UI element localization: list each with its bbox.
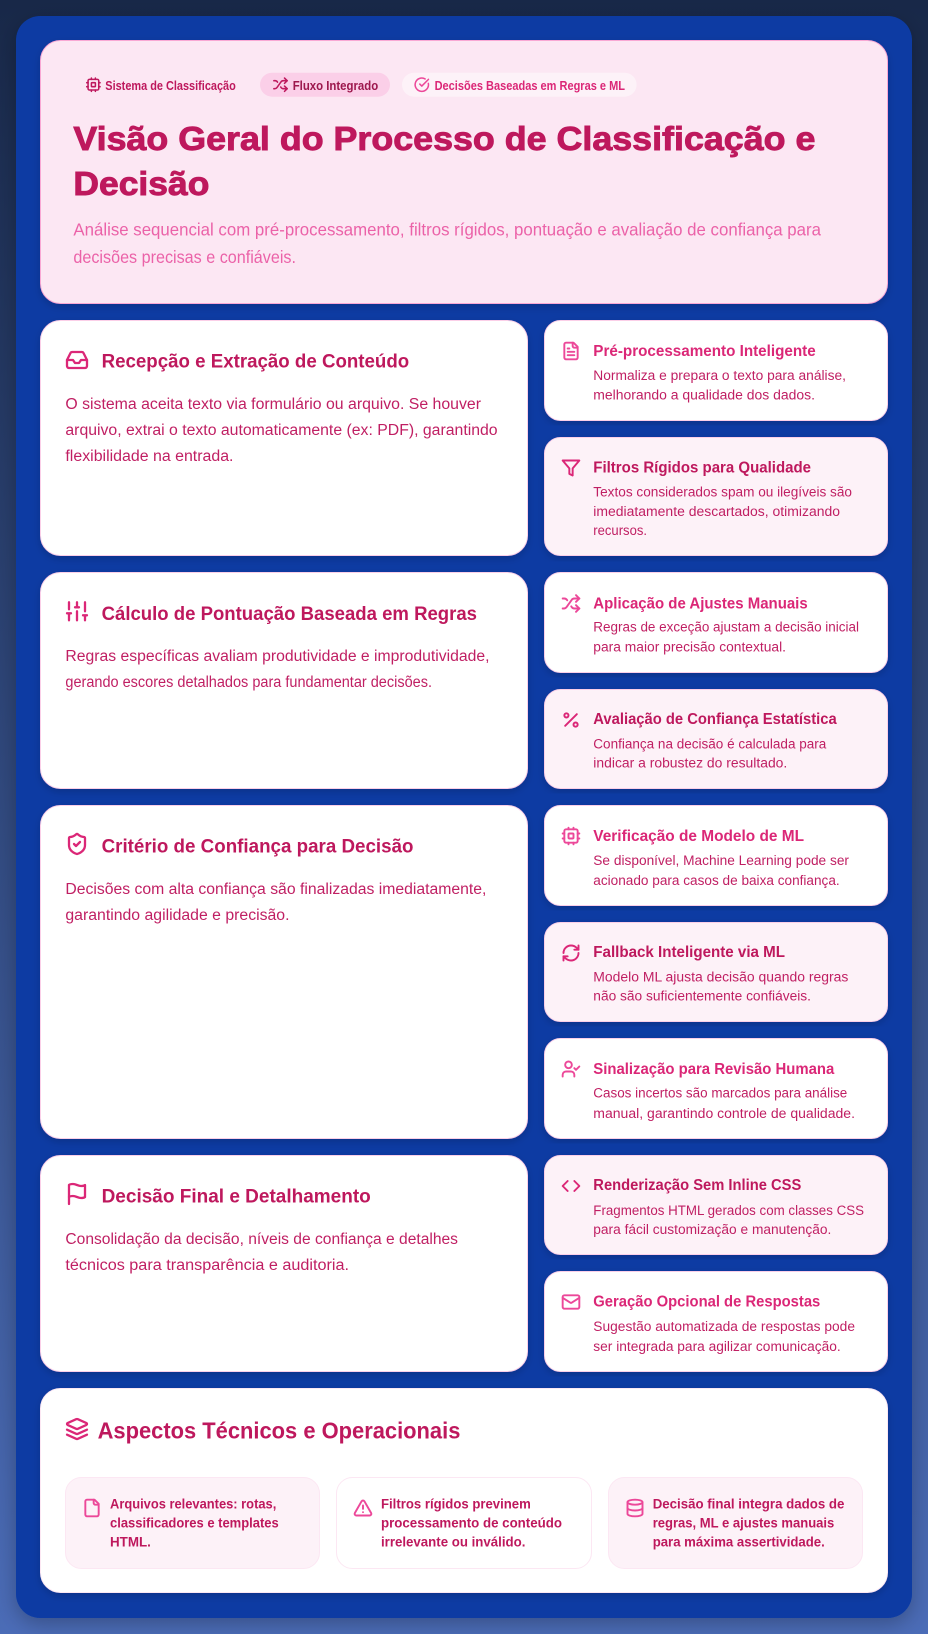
panel: Decisão Final: Decisão Final e Detalhamento: [102, 1186, 371, 1208]
card: Geração Opcional: Sugestão automatizada de respostas pode: [593, 1319, 855, 1334]
card: Avaliação de Confiança: [544, 690, 888, 788]
card: Aplicação de Ajustes: para maior precisão contextual.: [593, 640, 786, 655]
text block: [65, 396, 498, 465]
card: Renderização: para fácil customização e manutenção.: [593, 1222, 831, 1237]
card: Renderização: [544, 1156, 888, 1254]
header card background: [40, 40, 888, 304]
text block: Regras específicas avaliam produtividade e improdutividade,: [65, 648, 490, 665]
icon: layers: [67, 1419, 87, 1439]
text block: Consolidação da decisão, níveis de confiança e detalhes: [65, 1231, 458, 1248]
icon: circle check: [415, 78, 428, 91]
card: Filtros Rígidos: [544, 438, 888, 556]
card: Renderização: Renderização Sem Inline CSS: [593, 1177, 801, 1194]
icon: warning triangle: [355, 1500, 371, 1515]
text block: O sistema aceita texto via formulário ou arquivo. Se houver: [65, 396, 481, 413]
sub-card: filtros rígidos: [336, 1478, 592, 1568]
panel: Aspectos Técnicos e Operacionais: [40, 1388, 888, 1592]
title: Visão Geral do Processo de Classificação e: [73, 120, 815, 157]
sub-card: arquivos relevantes: classificadores e templates: [110, 1515, 279, 1530]
badge: Fluxo Integrado: Fluxo Integrado: [293, 79, 379, 93]
card: Sinalização para Revisão: manual, garantindo controle de qualidade.: [593, 1106, 855, 1121]
panel: Recepção e Extração de Conteúdo: [40, 320, 528, 556]
panel: header: [40, 40, 888, 304]
sub-card: decisão final: para máxima assertividade.: [653, 1534, 825, 1549]
subtitle: [73, 220, 821, 267]
text block: arquivo, extrai o texto automaticamente (ex: PDF), garantindo: [65, 422, 498, 439]
card: Avaliação de Confiança: Avaliação de Confiança Estatística: [593, 711, 837, 728]
text block: técnicos para transparência e auditoria.: [65, 1257, 349, 1274]
panel: Decisão Final: [40, 1156, 528, 1372]
icon: inbox: [67, 352, 87, 368]
badge: Decisões Baseadas em Regras e ML: [402, 73, 637, 97]
card: Geração Opcional: [544, 1272, 888, 1372]
sub-card: decisão final: Decisão final integra dados de: [653, 1496, 845, 1511]
sub-card: arquivos relevantes: HTML.: [110, 1534, 151, 1549]
card: Pré-processamento Inteligente: [544, 320, 888, 420]
card: Fallback Inteligente: Fallback Inteligente via ML: [593, 944, 785, 961]
card: Filtros Rígidos: Filtros Rígidos para Qualidade: [593, 459, 811, 476]
icon: flag: [69, 1184, 85, 1204]
card: Filtros Rígidos: Textos considerados spam ou ilegíveis são: [593, 485, 852, 500]
icon: shuffle: [563, 595, 579, 612]
text block: [65, 881, 486, 924]
text block: [65, 648, 490, 691]
icon: percent: [564, 713, 578, 727]
badge: Decisões Baseadas em Regras e ML: Decisões Baseadas em Regras e ML: [435, 79, 625, 93]
card: Sinalização para Revisão: Casos incertos são marcados para análise: [593, 1086, 847, 1101]
panel: Aspectos Técnicos e Operacionais: Aspectos Técnicos e Operacionais: [98, 1417, 460, 1443]
card: Filtros Rígidos: imediatamente descartados, otimizando: [593, 504, 840, 519]
card: Fallback Inteligente: Modelo ML ajusta decisão quando regras: [593, 970, 849, 985]
subtitle: decisões precisas e confiáveis.: [73, 247, 296, 267]
card: Geração Opcional: ser integrada para agilizar comunicação.: [593, 1339, 841, 1354]
sub-card: decisão final: regras, ML e ajustes manuais: [653, 1515, 834, 1530]
card: Filtros Rígidos: recursos.: [593, 523, 647, 538]
icon: file: [85, 1500, 99, 1516]
text block: Decisões com alta confiança são finalizadas imediatamente,: [65, 881, 486, 898]
sub-card: decisão final: [608, 1478, 862, 1568]
icon: mail: [563, 1295, 579, 1309]
card: Pré-processamento Inteligente: Pré-processamento Inteligente: [593, 343, 816, 360]
card: Aplicação de Ajustes: [544, 572, 888, 672]
text block: gerando escores detalhados para fundamentar decisões.: [65, 674, 432, 691]
panel: Cálculo de Pontuação: Cálculo de Pontuação Baseada em Regras: [102, 603, 477, 625]
title: Decisão: [73, 165, 209, 202]
card: Fallback Inteligente: não são suficientemente confiáveis.: [593, 989, 811, 1004]
icon: shuffle: [274, 78, 287, 91]
badge: Sistema de Classificação: Sistema de Classificação: [105, 79, 236, 93]
icon: user check: [563, 1061, 579, 1076]
card: Avaliação de Confiança: indicar a robustez do resultado.: [593, 755, 787, 770]
panel: Cálculo de Pontuação: [40, 572, 528, 788]
title: [73, 120, 815, 202]
card: Verificação de Modelo: [544, 806, 888, 906]
card: Pré-processamento Inteligente: melhorando a qualidade dos dados.: [593, 387, 815, 402]
icon: database: [627, 1500, 642, 1516]
icon: filter: [563, 460, 579, 475]
card: Pré-processamento Inteligente: Normaliza e prepara o texto para análise,: [593, 368, 846, 383]
card: Verificação de Modelo: acionado para casos de baixa confiança.: [593, 873, 840, 888]
badge: Fluxo Integrado: [260, 73, 390, 97]
icon: shield check: [69, 834, 85, 854]
panel: Critério de Confiança: [40, 806, 528, 1138]
card: Verificação de Modelo: Se disponível, Machine Learning pode ser: [593, 853, 850, 868]
card: Avaliação de Confiança: Confiança na decisão é calculada para: [593, 737, 827, 752]
panel: Critério de Confiança: Critério de Confiança para Decisão: [102, 836, 414, 858]
icon: cpu: [563, 828, 579, 844]
card: Geração Opcional: Geração Opcional de Respostas: [593, 1294, 820, 1311]
text block: garantindo agilidade e precisão.: [65, 907, 290, 924]
icon: file text: [564, 343, 578, 359]
text block: [65, 1231, 458, 1274]
card: Aplicação de Ajustes: Aplicação de Ajustes Manuais: [593, 595, 808, 612]
text block: flexibilidade na entrada.: [65, 448, 234, 465]
card: Fallback Inteligente: [544, 922, 888, 1022]
sub-card: filtros rígidos: Filtros rígidos previnem: [381, 1496, 531, 1511]
card: Renderização: Fragmentos HTML gerados com classes CSS: [593, 1203, 864, 1218]
sub-card: filtros rígidos: irrelevante ou inválido.: [381, 1534, 525, 1549]
card: Verificação de Modelo: Verificação de Modelo de ML: [593, 828, 804, 845]
card: Aplicação de Ajustes: Regras de exceção ajustam a decisão inicial: [593, 620, 859, 635]
card: Sinalização para Revisão: [544, 1038, 888, 1138]
icon: cpu: [87, 78, 100, 91]
sub-card: arquivos relevantes: [66, 1478, 320, 1568]
subtitle: Análise sequencial com pré-processamento, filtros rígidos, pontuação e avaliação de confiança para: [73, 220, 821, 240]
sub-card: filtros rígidos: processamento de conteúdo: [381, 1515, 562, 1530]
icon: refresh: [563, 945, 578, 960]
card: Sinalização para Revisão: Sinalização para Revisão Humana: [593, 1061, 835, 1078]
icon: code: [563, 1181, 579, 1191]
icon: sliders: [67, 602, 87, 620]
panel: Recepção e Extração de Conteúdo: Recepção e Extração de Conteúdo: [102, 351, 409, 373]
sub-card: arquivos relevantes: Arquivos relevantes: rotas,: [110, 1496, 276, 1511]
